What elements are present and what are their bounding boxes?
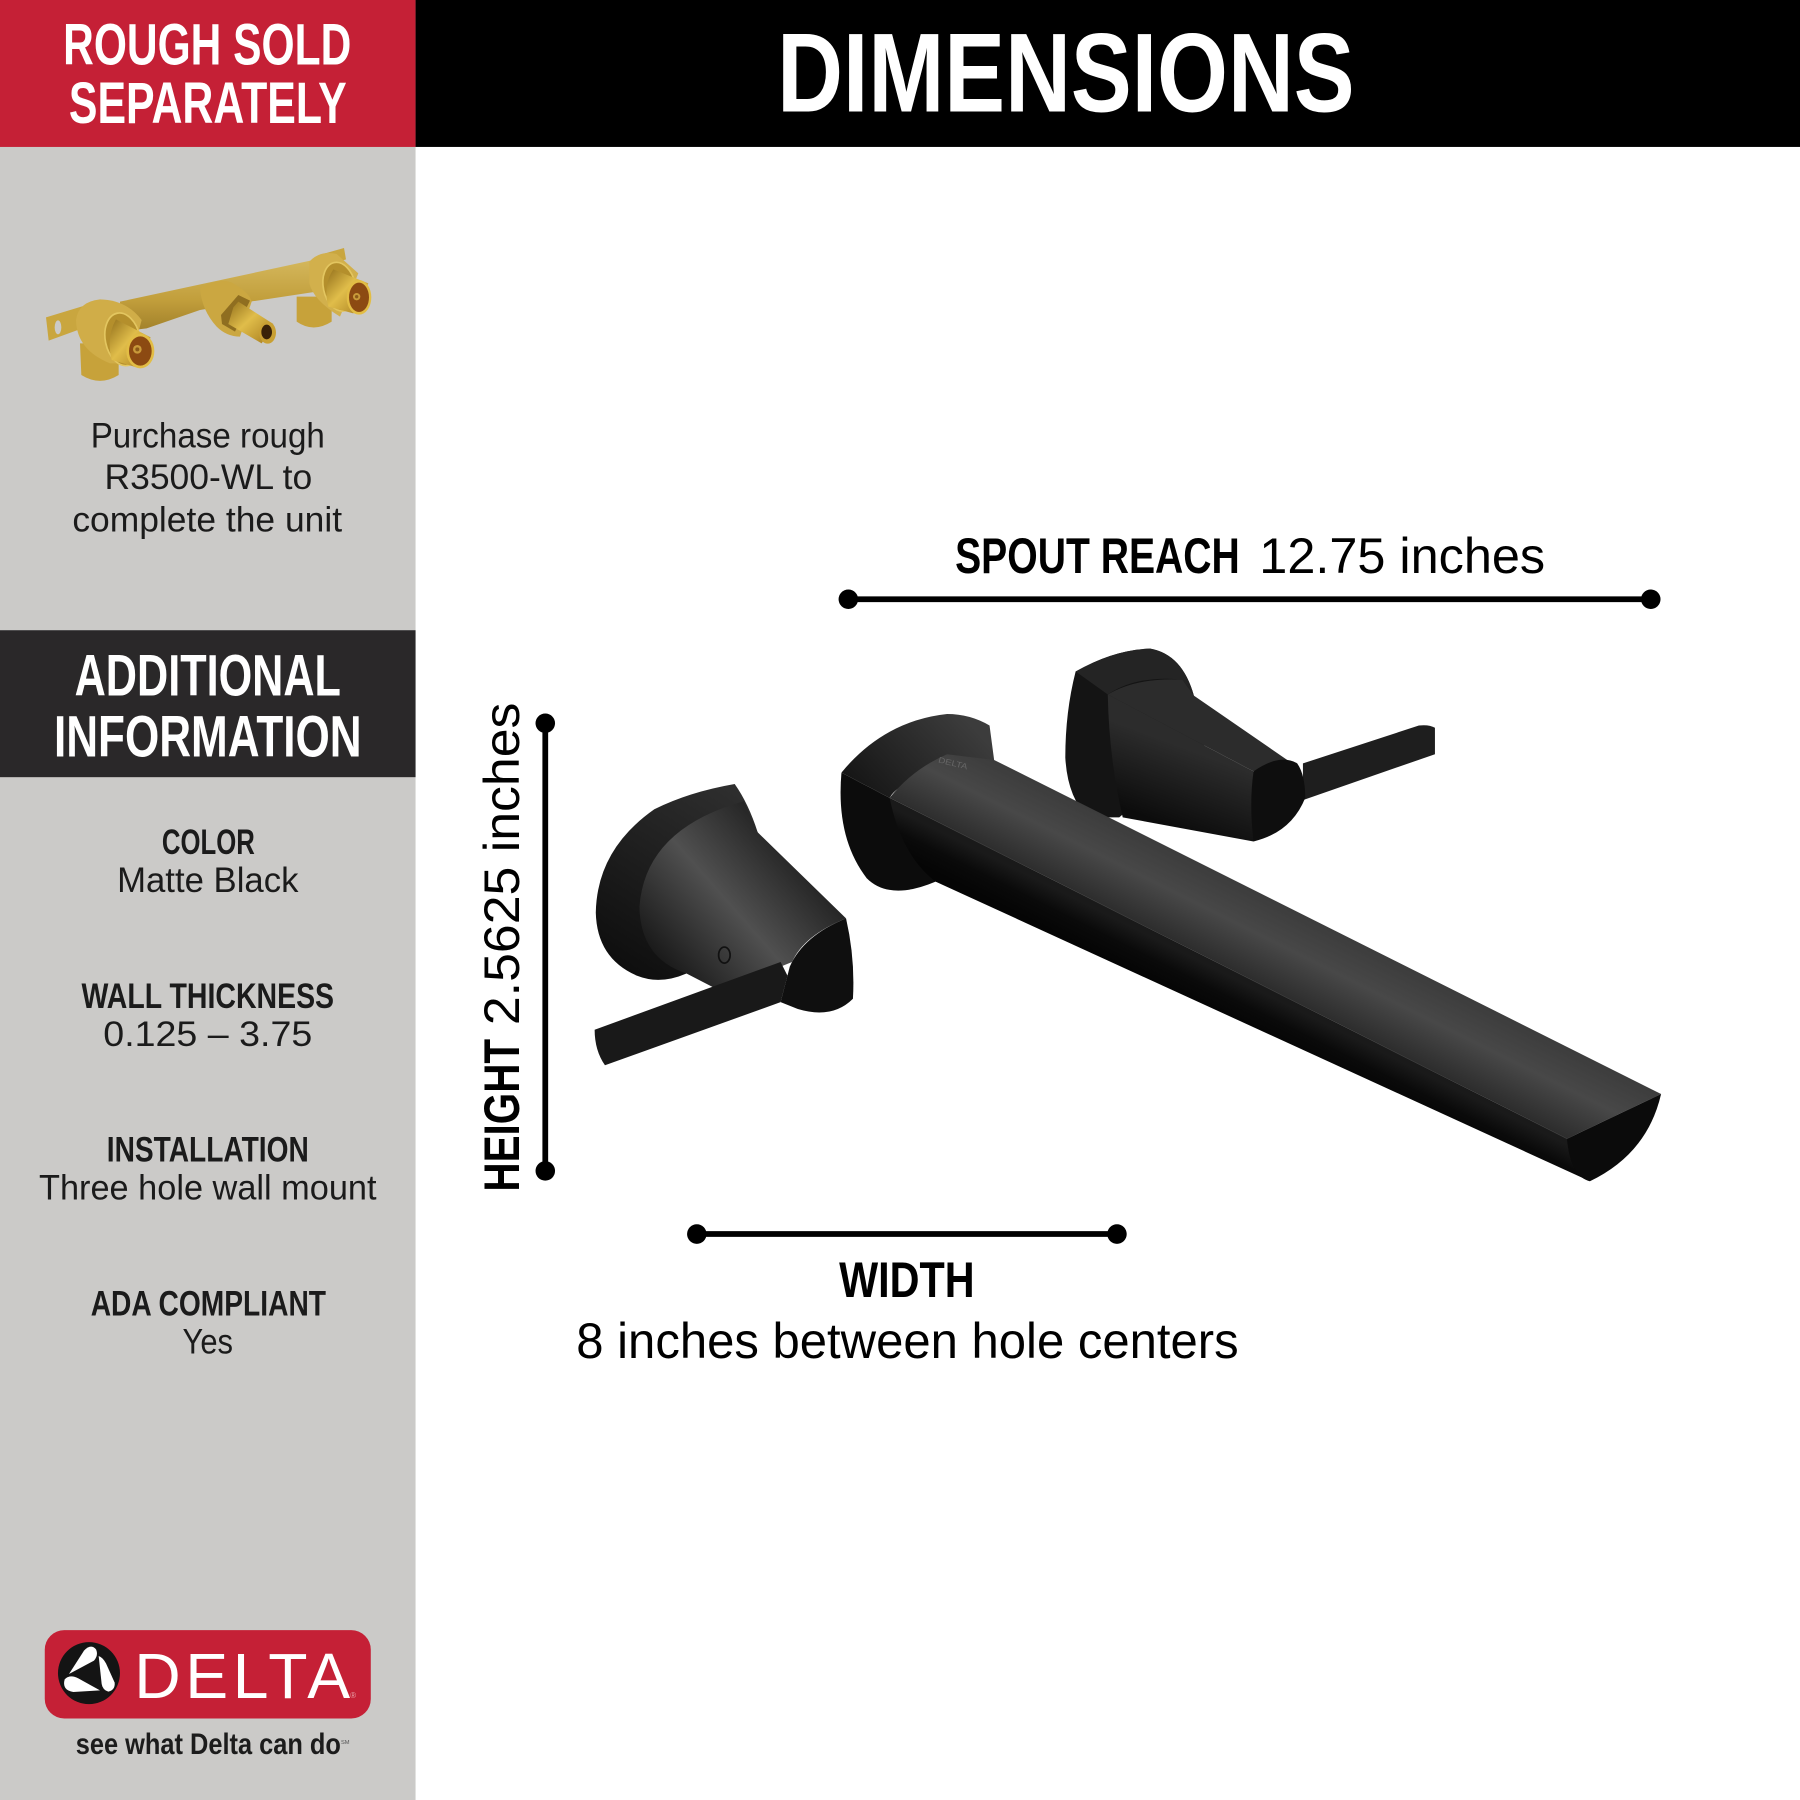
faucet: spout: [841, 714, 1661, 1181]
text: purchase rough: R3500-WL to: [104, 457, 312, 497]
text: purchase rough: Purchase rough: [91, 416, 325, 456]
faucet: right handle: [1065, 649, 1435, 841]
dimension: height: HEIGHT: [473, 1039, 530, 1192]
dimension: height: 2.5625 inches: [473, 703, 530, 1025]
heading: additional information: ADDITIONAL: [75, 644, 341, 709]
banner: rough sold separately: SEPARATELY: [69, 71, 347, 136]
title: dimensions: DIMENSIONS: [777, 9, 1355, 135]
logo: delta: [45, 1630, 371, 1761]
spec: ada compliant: [91, 1284, 326, 1361]
text: purchase rough: complete the unit: [72, 500, 342, 540]
spec: installation: Three hole wall mount: [39, 1168, 377, 1208]
dimension: width: WIDTH: [839, 1251, 975, 1308]
spec: wall thickness: WALL THICKNESS: [82, 976, 334, 1016]
small brand mark on spout: DELTA: [937, 755, 969, 772]
icon: delta triangle mark: [64, 1647, 115, 1692]
spec: ada compliant: Yes: [183, 1321, 233, 1361]
dimension: spout reach: 12.75 inches: [1259, 527, 1545, 584]
faucet: left handle: [595, 784, 853, 1065]
spec: installation: INSTALLATION: [107, 1130, 309, 1170]
spec: color: Matte Black: [117, 860, 299, 900]
dimension: width: [576, 1224, 1239, 1369]
dimension: width: 8 inches between hole centers: [576, 1312, 1239, 1369]
logo: delta: see what Delta can do: [76, 1728, 341, 1761]
heading: additional information: [0, 630, 416, 777]
heading: additional information: INFORMATION: [54, 705, 362, 770]
spec: wall thickness: 0.125 – 3.75: [103, 1014, 312, 1054]
icon: brass rough-in valve: [46, 248, 371, 381]
dimension: spout reach: [839, 527, 1661, 609]
spec: wall thickness: [82, 976, 334, 1054]
spec: ada compliant: ADA COMPLIANT: [91, 1284, 326, 1324]
logo: delta: SM: [341, 1740, 350, 1746]
text: purchase rough: [72, 416, 342, 540]
panel: left sidebar background: [0, 0, 416, 1800]
logo: delta: ®: [350, 1691, 356, 1700]
spec: installation: [39, 1130, 377, 1208]
spec: color: [117, 822, 299, 900]
spec: color: COLOR: [162, 822, 255, 862]
banner: rough sold separately: [0, 0, 416, 147]
dimension: height: [473, 703, 555, 1192]
banner: rough sold separately: ROUGH SOLD: [63, 12, 351, 77]
title: dimensions: [416, 0, 1800, 147]
dimension: spout reach: SPOUT REACH: [955, 527, 1240, 584]
logo: delta: DELTA: [134, 1640, 350, 1712]
